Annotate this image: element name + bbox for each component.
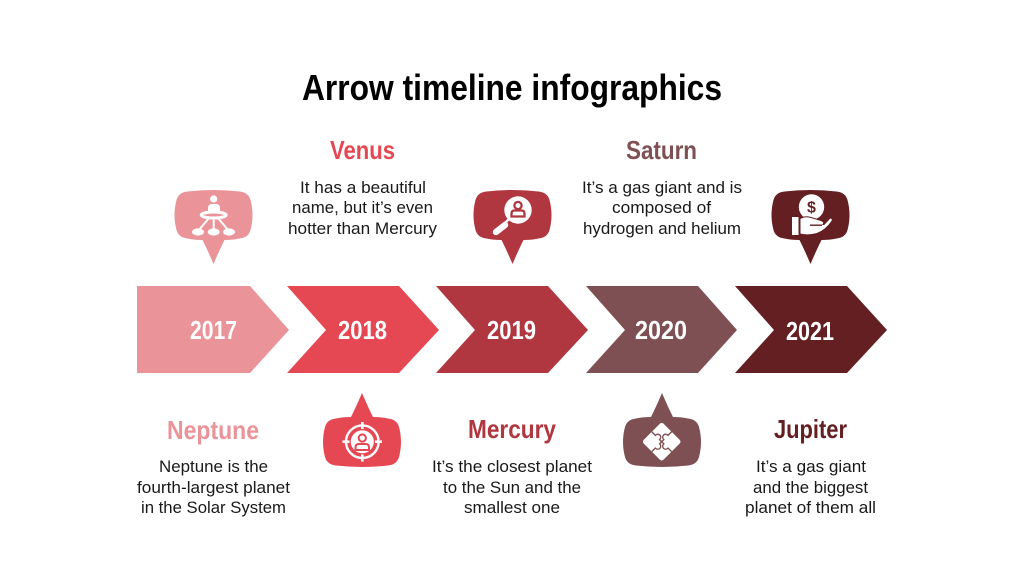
arrow: 2019: 2019: [487, 317, 536, 345]
text: Venus description: It has a beautiful: [300, 178, 426, 197]
panel: 2019 Mercury: [432, 190, 592, 517]
panel: 2020 Saturn: [582, 135, 742, 467]
text: Neptune description: fourth-largest planet: [137, 478, 290, 497]
arrow: 2021: 2021: [786, 318, 834, 346]
panel: 2018 Venus: [287, 135, 439, 467]
title: Arrow timeline infographics: [302, 67, 722, 108]
arrow: 2020: [586, 286, 737, 373]
icon: people network bubble: [174, 190, 252, 264]
text: Saturn description: composed of: [612, 198, 711, 217]
arrow: 2019: [436, 286, 588, 373]
arrow: 2018: [287, 286, 439, 373]
text: Saturn description: [582, 178, 742, 238]
heading: Mercury: Mercury: [468, 414, 556, 444]
text: Jupiter description: It’s a gas giant: [756, 457, 866, 476]
icon: target person bubble: [323, 393, 401, 467]
text: Venus description: [288, 178, 437, 238]
text: Neptune description: in the Solar System: [141, 498, 286, 517]
icon: hand with coin bubble: $: [807, 200, 816, 216]
text: Mercury description: [432, 457, 592, 517]
panel: 2021 Jupiter: [735, 190, 887, 517]
heading: Venus: Venus: [330, 135, 395, 165]
text: Mercury description: It’s the closest planet: [432, 457, 592, 476]
text: Neptune description: Neptune is the: [159, 457, 268, 476]
arrow: 2017: 2017: [190, 317, 237, 345]
text: Saturn description: hydrogen and helium: [583, 219, 741, 238]
heading: Jupiter: Jupiter: [774, 414, 847, 444]
heading: Saturn: Saturn: [626, 135, 697, 165]
arrow: 2020: 2020: [635, 317, 687, 345]
text: Jupiter description: planet of them all: [745, 498, 876, 517]
arrow: 2018: 2018: [338, 317, 387, 345]
text: Jupiter description: [745, 457, 876, 517]
arrow: 2017: [137, 286, 289, 373]
icon: puzzle bubble: [623, 393, 701, 467]
icon: magnifier person bubble: [474, 190, 552, 264]
text: Mercury description: smallest one: [464, 498, 560, 517]
text: Venus description: name, but it’s even: [292, 198, 433, 217]
heading: Neptune: Neptune: [167, 415, 259, 445]
text: Mercury description: to the Sun and the: [443, 478, 581, 497]
text: Neptune description: [137, 457, 290, 517]
text: Venus description: hotter than Mercury: [288, 219, 437, 238]
arrow: 2021: [735, 286, 887, 373]
text: Jupiter description: and the biggest: [753, 478, 868, 497]
icon: hand with coin bubble: [772, 190, 850, 264]
panel: 2017 Neptune: [137, 190, 290, 517]
text: Saturn description: It’s a gas giant and is: [582, 178, 742, 197]
